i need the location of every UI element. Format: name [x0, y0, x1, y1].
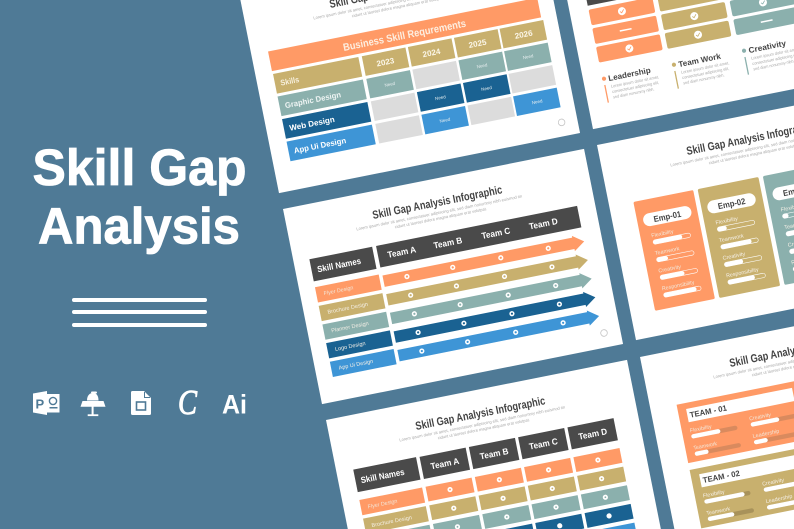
team 02 card: Teamwork [706, 506, 731, 517]
team 02 card: Flexibility [702, 489, 726, 500]
arrow: app ui design [397, 308, 601, 364]
icon: illustrator: Ai [222, 390, 247, 420]
creativity note: Creativity [748, 39, 787, 55]
team work note: consectetuer adipiscing elit, [682, 66, 730, 80]
team 01 card: Teamwork [693, 441, 718, 452]
slide title: Skill Gap Analysis Infographic [415, 395, 547, 433]
divider lines [72, 298, 207, 327]
table headers: Team A [430, 456, 461, 471]
title [32, 139, 246, 254]
employee card 1: Emp-01 [653, 209, 682, 224]
creativity column [726, 0, 794, 35]
requirement cells: Need [439, 117, 451, 124]
requirement cells: Need [531, 98, 543, 105]
panel: business skill requirements slide [240, 0, 580, 193]
employee card 1 [633, 190, 715, 311]
requirement cells: Need [384, 81, 396, 88]
employee card 2: Teamwork [719, 233, 745, 244]
arrow: planner design [390, 271, 593, 326]
requirement cells: Need [481, 85, 493, 92]
arrow: logo design [393, 290, 597, 345]
team header [376, 206, 581, 268]
leadership note: sed diam nonummy nibh. [613, 86, 655, 100]
panel: soft skills slide [554, 0, 794, 129]
team work note: Team Work [678, 52, 722, 69]
team 01 card: Flexibility [689, 424, 713, 434]
skills column: App Ui Design [293, 136, 347, 155]
table headers: Team C [528, 436, 559, 452]
skill rows: Brochure Design [371, 515, 412, 529]
table headers [353, 418, 618, 492]
employee card 1: Teamwork [654, 246, 680, 257]
skill rows [315, 275, 397, 377]
team grid [426, 448, 637, 529]
year headers: 2023 [376, 56, 396, 68]
skill rows [359, 487, 436, 529]
table headers: Skill Names [360, 467, 405, 485]
table headers: Team D [578, 426, 608, 442]
team work note: Lorem ipsum dolor sit amet, [681, 60, 730, 75]
skill rows: Brochure Design [327, 302, 368, 316]
skills column [273, 57, 376, 161]
team header: Team A [387, 244, 418, 260]
leadership note [601, 64, 662, 103]
employee card 1: Flexibility [651, 229, 675, 239]
icon: canva: C [178, 383, 198, 422]
employee card 3 [763, 164, 794, 285]
title: Skill Gap [32, 139, 246, 196]
team 02 card: Leadership [765, 494, 793, 505]
team 02 card [690, 445, 794, 528]
team header: Team D [528, 216, 559, 232]
table header [584, 0, 651, 6]
team work column [657, 0, 731, 49]
year headers: 2024 [422, 47, 442, 59]
icon: google slides [131, 391, 151, 415]
table headers: Team B [479, 446, 509, 461]
slide subtitle: Lorem ipsum dolor sit amet, consectetuer adipiscing elit, sed diam nonummy nibh euismod tin [399, 404, 566, 442]
team work note: sed diam nonummy nibh. [683, 72, 725, 86]
leadership note: Lorem ipsum dolor sit amet, [610, 74, 659, 89]
skill names header: Skill Names [316, 256, 362, 274]
employee card 1: Creativity [658, 264, 682, 275]
icon: keynote [80, 392, 106, 416]
creativity note [741, 36, 794, 75]
icon: powerpoint [33, 391, 60, 415]
team 01 card: TEAM - 01 [689, 403, 728, 420]
leadership note: Leadership [608, 66, 652, 83]
requirement cells: Need [476, 62, 488, 69]
team 01 card: Leadership [752, 429, 780, 440]
employee card 2: Responsibility [726, 267, 760, 279]
panel: team table slide [326, 360, 666, 529]
panel: employee slide [597, 85, 794, 340]
requirement cells: Need [435, 94, 447, 101]
skills column: Web Design [289, 115, 336, 133]
leadership note: consectetuer adipiscing elit, [612, 80, 660, 94]
slide subtitle: cidunt ut laoreet dolore magna aliquam erat volutpat. [437, 417, 530, 440]
team 02 card: Creativity [762, 477, 785, 488]
skill rows: Flyer Design [367, 499, 398, 510]
title: Analysis [38, 198, 240, 254]
team header: Team B [433, 235, 463, 251]
skill rows: Planner Design [331, 321, 369, 334]
slide subtitle: cidunt ut laoreet dolore magna aliquam erat volutpat. [394, 206, 487, 229]
leadership column [589, 0, 663, 63]
year headers: 2026 [514, 28, 534, 41]
team work note [671, 50, 732, 89]
logo mark [600, 329, 608, 337]
table heading band: Business Skill Requrements [342, 18, 467, 54]
employee card 2: Creativity [722, 251, 746, 262]
arrow: brochure design [386, 252, 589, 308]
employee card 2: Emp-02 [717, 196, 747, 211]
requirement cells [366, 43, 561, 144]
panel: arrow skill chart slide [283, 149, 623, 404]
year headers: 2025 [468, 38, 488, 50]
skill names header [309, 247, 377, 281]
team 02 card: TEAM - 02 [702, 469, 741, 485]
slide title: Skill Gap Analysis Infographic [372, 184, 504, 222]
icon: powerpoint: P [36, 396, 44, 412]
panel: team slide [640, 297, 794, 529]
skill rows: Logo Design [335, 341, 366, 353]
team 01 card: Creativity [749, 412, 772, 423]
skill rows: App Ui Design [338, 359, 374, 372]
employee card 2 [698, 177, 780, 298]
requirement cells: Need [522, 53, 534, 60]
logo mark [558, 119, 565, 126]
team header: Team C [481, 225, 512, 241]
team 01 card [677, 380, 794, 463]
skill rows: Flyer Design [323, 285, 354, 297]
year headers [362, 20, 547, 76]
arrow: flyer design [382, 234, 586, 289]
skills column: Graphic Design [284, 90, 342, 110]
skills column: Skills [280, 75, 300, 88]
employee card 1: Responsibility [661, 280, 695, 292]
employee card 2: Flexibility [715, 216, 739, 227]
slide subtitle: Lorem ipsum dolor sit amet, consectetuer adipiscing elit, sed diam nonummy nibh euismod tin [356, 193, 523, 231]
table heading band [268, 0, 541, 71]
